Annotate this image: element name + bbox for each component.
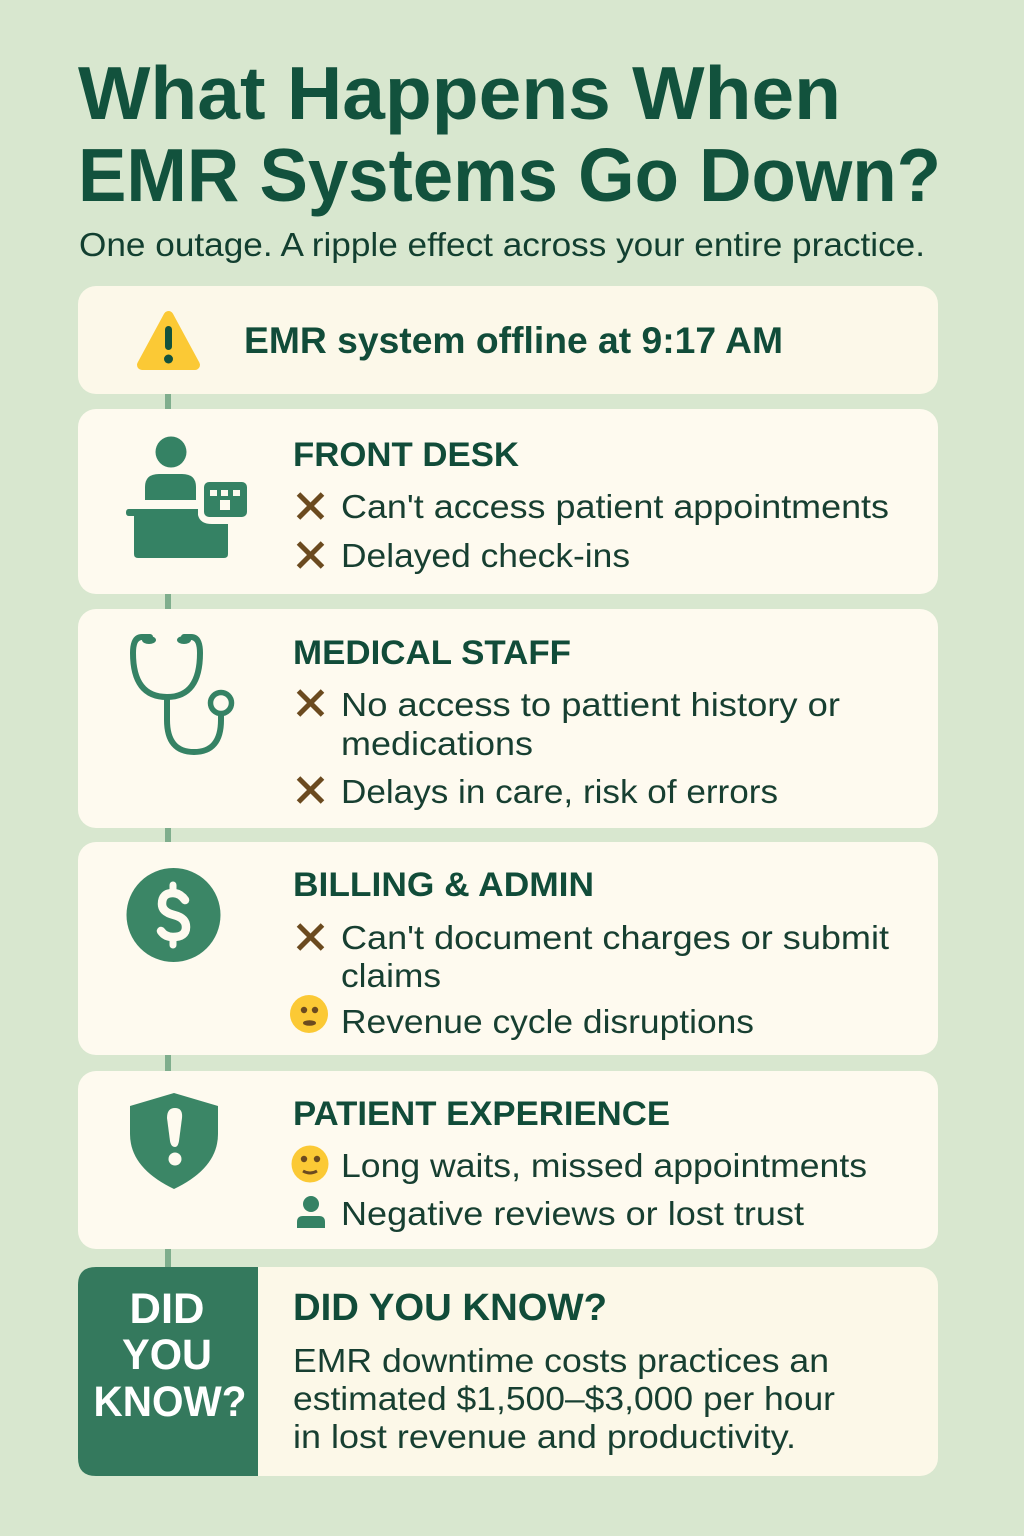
subtitle: One outage. A ripple effect across your entire practice. — [79, 226, 925, 263]
list item: charges — [298, 919, 889, 994]
list item: charges: Can't document charges or submit — [341, 919, 889, 956]
list item: check-ins: Delayed check-ins — [341, 537, 630, 574]
title: What Happens When — [78, 51, 841, 135]
list item: delays: Delays in care, risk of errors — [341, 773, 778, 810]
connector line — [165, 394, 171, 1267]
icon: person — [297, 1196, 325, 1228]
panel: billing and admin — [78, 842, 938, 1055]
body text — [293, 1342, 835, 1455]
list item: patient history: medications — [341, 725, 533, 762]
heading: did you know: DID YOU KNOW? — [293, 1287, 607, 1329]
panel: medical staff — [78, 609, 938, 828]
panel: patient experience — [78, 1071, 938, 1249]
list item: charges: claims — [341, 957, 441, 994]
icon: shield with exclamation — [130, 1093, 218, 1189]
list item: patient history: No access to pattient history or — [341, 686, 840, 723]
body text: estimated $1,500–$3,000 per hour — [293, 1380, 835, 1417]
icon: stethoscope — [133, 637, 232, 752]
did you know badge — [78, 1267, 258, 1476]
heading: patient experience: PATIENT EXPERIENCE — [293, 1095, 670, 1133]
icon: face — [292, 1146, 328, 1182]
panel: system offline alert — [78, 286, 938, 394]
panel: did you know — [78, 1267, 938, 1476]
title: EMR Systems Go Down? — [78, 133, 941, 217]
list item: negative reviews: Negative reviews or lost trust — [341, 1195, 804, 1232]
list item: revenue cycle: Revenue cycle disruptions — [341, 1003, 754, 1040]
heading: medical staff: MEDICAL STAFF — [293, 634, 571, 672]
did you know badge: YOU — [122, 1331, 212, 1379]
list item: appointments: Can't access patient appointments — [341, 488, 889, 525]
icon: sad face — [290, 995, 328, 1033]
icon: receptionist at desk — [126, 436, 247, 558]
list item: long waits: Long waits, missed appointments — [341, 1147, 867, 1184]
icon: warning triangle — [142, 316, 195, 365]
body text: in lost revenue and productivity. — [293, 1418, 796, 1455]
icon: dollar coin — [126, 868, 220, 962]
alert text: EMR system offline at 9:17 AM — [244, 320, 783, 361]
did you know badge: DID — [130, 1285, 204, 1333]
heading: billing: BILLING & ADMIN — [293, 866, 594, 904]
list item: patient history — [298, 686, 840, 762]
title — [78, 51, 941, 217]
panel: front desk — [78, 409, 938, 594]
heading: front desk: FRONT DESK — [293, 436, 519, 474]
did you know badge: KNOW? — [94, 1378, 246, 1426]
body text: EMR downtime costs practices an — [293, 1342, 829, 1379]
list item: revenue cycle — [290, 995, 754, 1040]
